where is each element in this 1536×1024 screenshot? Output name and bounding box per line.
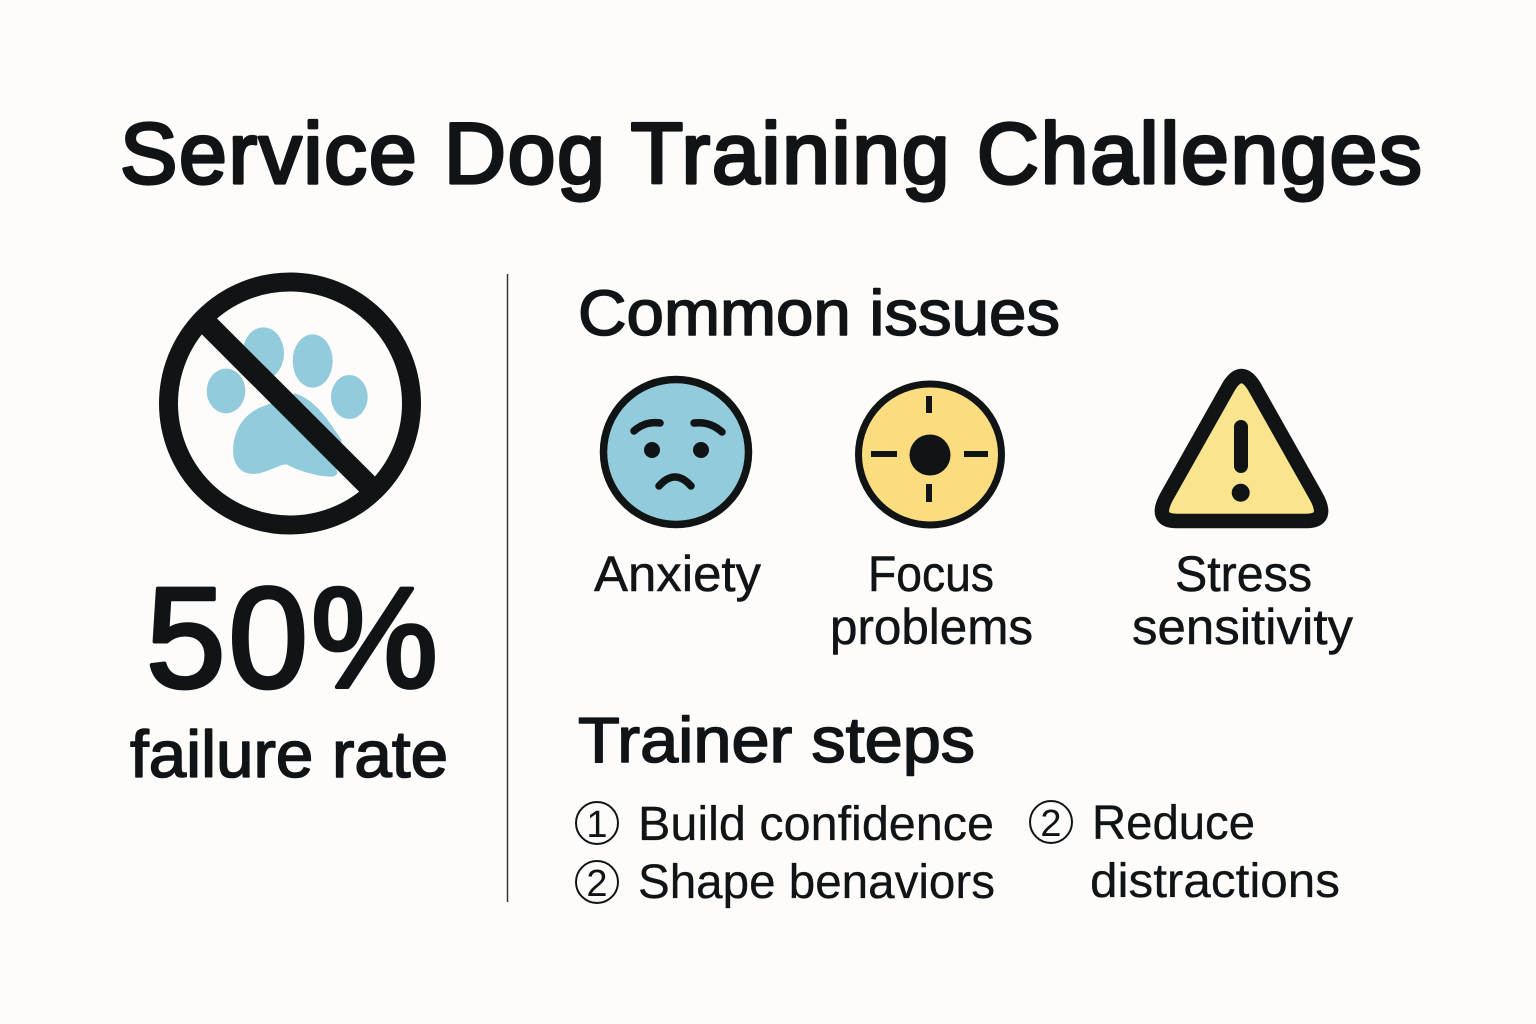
label: focus problems: problems	[830, 599, 1033, 655]
step: shape behaviors: 2	[586, 863, 608, 905]
step: build confidence: 1	[586, 804, 608, 846]
label: anxiety: Anxiety	[594, 546, 761, 602]
step: build confidence: Build confidence	[638, 798, 994, 851]
panel: stress sensitivity	[1132, 376, 1353, 655]
title: Service Dog Training Challenges	[120, 106, 1422, 202]
label: stress sensitivity	[1132, 546, 1353, 655]
step: reduce distractions	[1030, 797, 1340, 908]
step: shape behaviors: Shape benaviors	[638, 856, 995, 909]
icon: focus target	[858, 384, 1002, 525]
panel: focus problems	[830, 384, 1033, 655]
icon: worried face	[604, 380, 748, 524]
panel: anxiety	[594, 380, 761, 602]
icon: warning triangle	[1162, 376, 1321, 521]
icon: crossed-out paw	[168, 282, 412, 525]
step: reduce distractions: distractions	[1090, 855, 1340, 908]
label: focus problems: Focus	[868, 546, 994, 602]
stat: 50%: 50%	[146, 559, 438, 718]
heading: trainer steps: Trainer steps	[578, 704, 975, 776]
step: reduce distractions: Reduce	[1092, 797, 1255, 850]
label: focus problems	[830, 546, 1033, 655]
label: failure rate: failure rate	[130, 717, 448, 791]
label: stress sensitivity: Stress	[1175, 546, 1312, 602]
label: stress sensitivity: sensitivity	[1132, 599, 1353, 655]
heading: common issues: Common issues	[578, 277, 1060, 349]
divider	[506, 274, 508, 902]
step: reduce distractions: 2	[1040, 803, 1062, 845]
panel: failure rate	[130, 282, 448, 791]
